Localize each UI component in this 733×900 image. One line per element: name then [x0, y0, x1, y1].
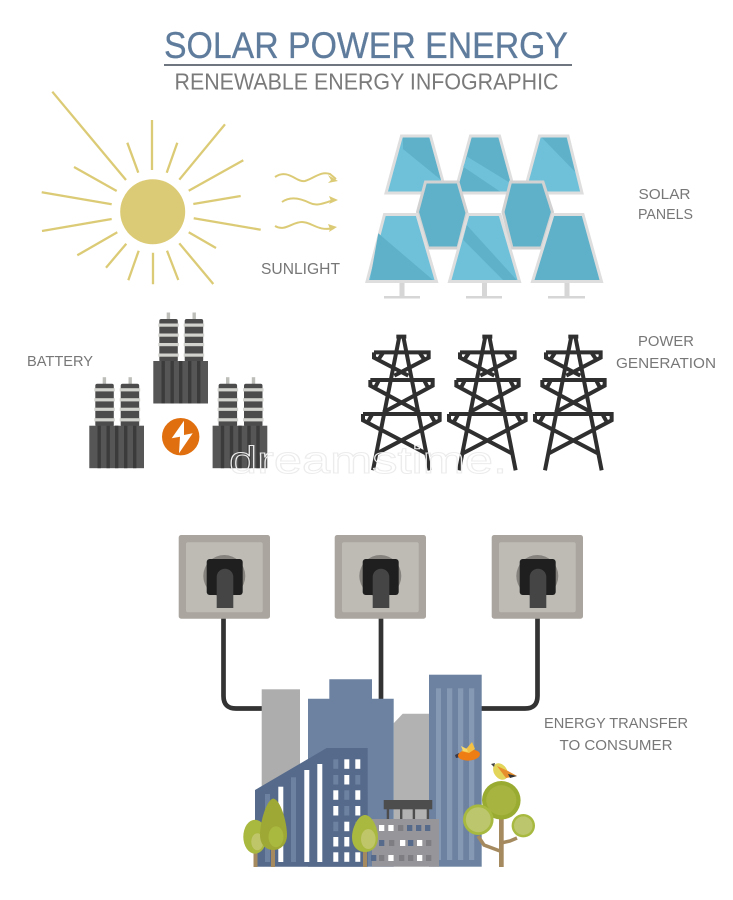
icon: sunlight wave arrows	[275, 173, 338, 232]
building: tall blue	[429, 675, 482, 867]
label: battery: BATTERY	[27, 353, 93, 370]
bottom row panels	[367, 214, 602, 282]
tree: small left	[243, 820, 267, 867]
building: main blue	[308, 679, 394, 867]
subtitle: RENEWABLE ENERGY INFOGRAPHIC	[174, 68, 558, 94]
building: gray back left	[262, 689, 300, 799]
label: solar panels: SOLAR	[638, 186, 691, 203]
label: power generation: GENERATION	[616, 355, 716, 372]
title: SOLAR POWER ENERGY	[164, 24, 568, 66]
watermark: dreamstime.	[229, 440, 507, 482]
label: energy transfer to consumer: TO CONSUMER	[560, 737, 673, 754]
icon: yellow bird	[490, 760, 517, 783]
label: sunlight: SUNLIGHT	[261, 261, 341, 278]
label: energy transfer to consumer: ENERGY TRANSFER	[544, 715, 688, 732]
illustration: city	[243, 675, 535, 867]
icon: batteries	[89, 312, 267, 468]
tree: right round	[463, 781, 535, 867]
top row panels	[386, 136, 582, 193]
tree: middle	[352, 815, 378, 867]
icon: wall sockets with plugs	[179, 535, 583, 619]
label: solar panels	[638, 186, 693, 223]
building: gray back right	[394, 714, 430, 825]
hexagons	[418, 182, 552, 248]
label: solar panels: PANELS	[638, 206, 693, 223]
building: low gray	[371, 800, 439, 867]
label: energy transfer to consumer	[544, 715, 688, 754]
label: power generation: POWER	[638, 333, 694, 350]
cables	[224, 606, 538, 708]
tree: tall left	[260, 798, 287, 867]
panel: solar panels	[367, 136, 602, 298]
building: dark blue front	[255, 748, 368, 867]
icon: orange lightning badge	[162, 418, 199, 455]
icon: orange bird	[455, 742, 480, 761]
label: power generation	[616, 333, 716, 372]
stands	[384, 283, 585, 298]
icon: transmission towers	[363, 337, 612, 470]
icon: sun with rays	[42, 92, 261, 284]
